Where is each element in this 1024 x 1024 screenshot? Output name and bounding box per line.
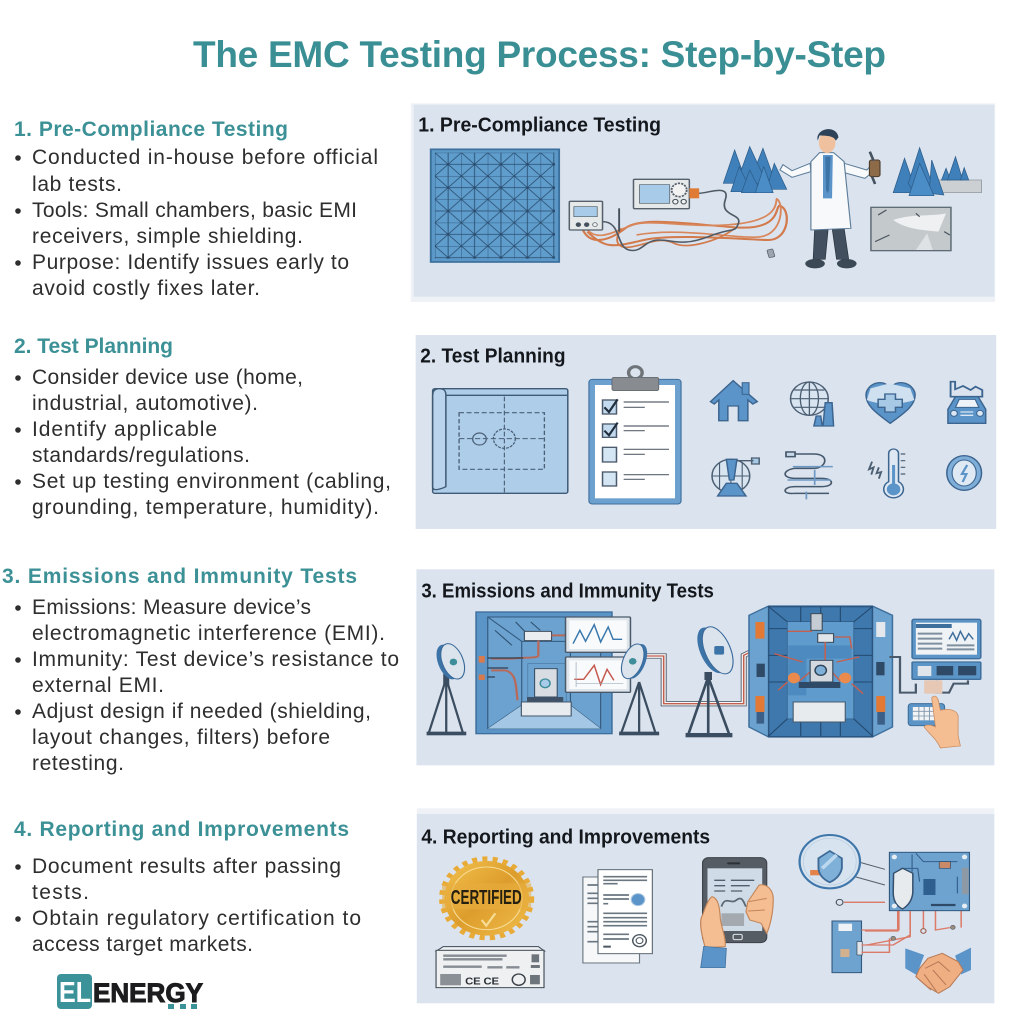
bullet list: step 1: Purpose: Identify issues early to [32,251,349,274]
panel: 4. reporting and improvements [417,808,994,1003]
logo: EL Energy: EL [59,977,91,1009]
heading: emissions and immunity tests: 3. Emissions and Immunity Tests [2,565,357,588]
bullet list: step 3: Adjust design if needed (shielding, [32,700,371,723]
handshake [905,948,971,993]
bullet list: step 4: tests. [32,881,89,904]
bullet list: step 1: Conducted in-house before official [32,146,378,169]
panel heading: 1. Pre-Compliance Testing [418,114,661,136]
bullet list: step 4: Obtain regulatory certification to [32,907,361,930]
bullet list: step 3: electromagnetic interference (EMI). [32,622,385,645]
bullet list: step 4: Document results after passing [32,855,341,878]
text block: step 3 [2,565,399,775]
icon: medical heart [866,383,915,423]
panel: 2. test planning [416,335,996,529]
bullet list: step 2: Consider device use (home, [32,366,303,389]
bullet list: step 4 [15,855,361,956]
control unit [889,657,981,694]
concrete sample panel [871,207,951,251]
heading: test planning: 2. Test Planning [14,335,173,358]
report documents [583,870,652,963]
antenna on tripod left [427,641,469,735]
bullet list: step 1 [15,146,378,300]
logo: EL Energy [57,974,203,1009]
control monitor [912,619,981,659]
bullet list: step 2: Set up testing environment (cabling, [32,470,391,493]
shielding mesh panel [431,149,559,262]
small connector [767,249,775,258]
bullet list: step 1: Tools: Small chambers, basic EMI [32,199,357,222]
absorber cones left [723,147,787,193]
icon: power gauge [947,456,982,490]
icon: globe and factory [791,382,834,426]
EMI receiver [633,179,699,209]
magnified shield [800,835,860,888]
heading: reporting and improvements: 4. Reporting and Improvements [14,818,349,841]
panel heading: 3. Emissions and Immunity Tests [421,580,714,602]
antenna on large tripod [686,623,739,737]
icon: automotive and factory [948,382,986,423]
text block: step 1 [14,118,378,300]
emissions graph monitor [566,617,630,652]
panel: 1. pre-compliance testing [411,103,995,302]
scientist in lab coat [780,129,880,268]
emissions test chamber [476,612,612,734]
bullet list: step 2: grounding, temperature, humidity). [32,496,379,519]
panel: 3. emissions and immunity tests [416,569,994,765]
panel heading: 4. Reporting and Improvements [421,826,710,848]
certified seal: CERTIFIED [451,886,522,909]
bullet list: step 1: lab tests. [32,173,122,196]
keyboard and hand [908,696,960,748]
logo: EL Energy: ENERGY [93,978,203,1008]
absorber cones right [893,148,982,196]
bullet list: step 3: external EMI. [32,674,164,697]
clipboard checklist [589,367,681,504]
blueprint drawing [433,389,568,493]
compliance label plate: CE CE [465,976,499,987]
icon: home [710,381,757,421]
bullet list: step 2: industrial, automotive). [32,392,258,415]
title: The EMC Testing Process: Step-by-Step [193,34,886,75]
panel heading: 2. Test Planning [420,345,566,367]
bullet list: step 1: receivers, simple shielding. [32,225,303,248]
text block: step 2 [14,335,391,519]
bullet list: step 3 [15,596,399,775]
bullet list: step 2 [15,366,391,519]
compliance label plate [436,947,544,988]
coaxial cables [640,648,759,704]
bullet list: step 3: layout changes, filters) before [32,726,330,749]
orange cables [583,190,787,251]
icon: thermometer [869,449,905,498]
small circuit board [832,911,910,973]
bullet list: step 3: Immunity: Test device’s resistance to [32,648,399,671]
bullet list: step 1: avoid costly fixes later. [32,277,260,300]
circuit board with shield [836,852,969,945]
icon: antenna on globe [712,458,759,496]
tablet with hands [701,858,773,968]
bullet list: step 3: retesting. [32,752,124,775]
bullet list: step 2: standards/regulations. [32,444,250,467]
immunity test chamber [749,606,892,737]
small EMI receiver [569,201,619,232]
immunity graph monitor [566,657,630,692]
text block: step 4 [14,818,361,956]
bullet list: step 3: Emissions: Measure device’s [32,596,311,619]
heading: pre-compliance testing: 1. Pre-Compliance Testing [14,118,288,141]
icon: coiled cable [785,452,833,499]
bullet list: step 4: access target markets. [32,933,253,956]
antenna on tripod middle [617,642,659,735]
certified seal [442,860,531,937]
bullet list: step 2: Identify applicable [32,418,217,441]
